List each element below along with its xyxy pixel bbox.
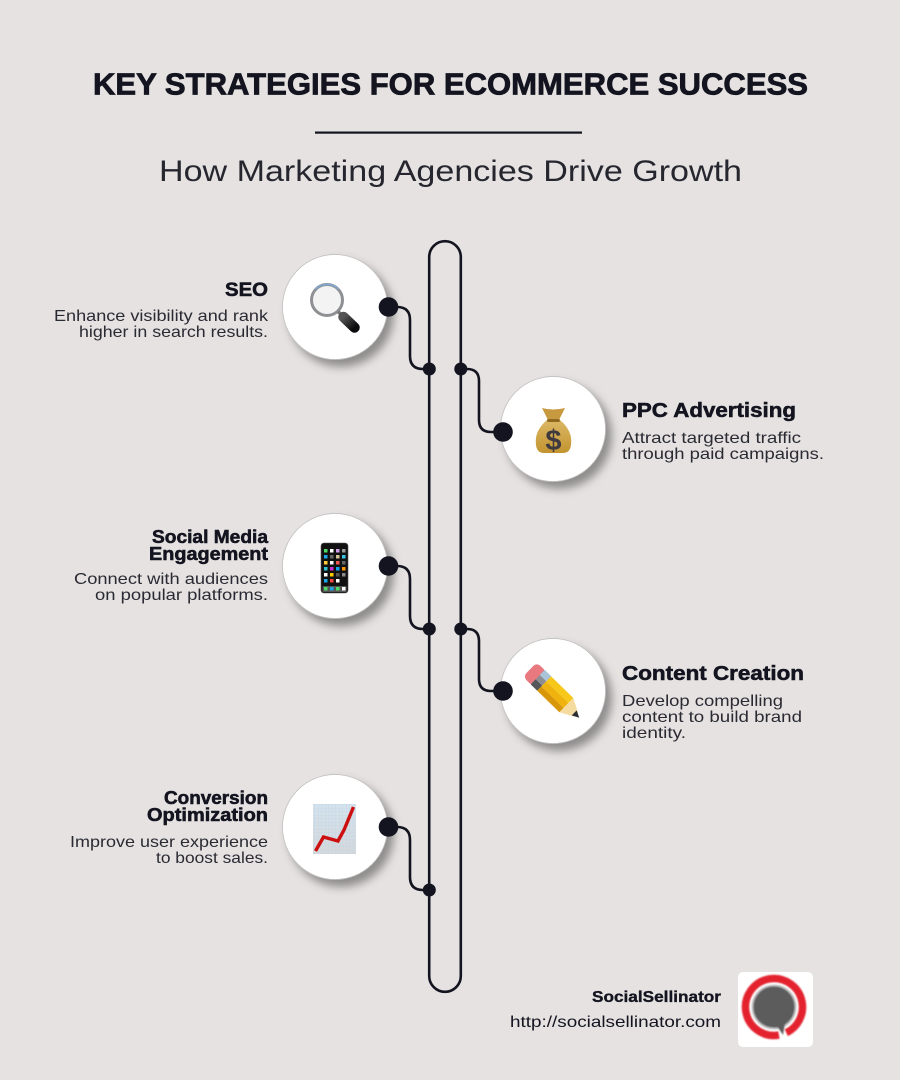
conversion text: Optimization [147, 805, 268, 825]
PPC text [622, 400, 824, 463]
SEO text: higher in search results. [79, 324, 268, 341]
footer brand text [510, 989, 721, 1031]
PPC text: through paid campaigns. [622, 446, 824, 463]
content creation text: content to build brand [622, 709, 802, 726]
content creation text [622, 663, 804, 742]
divider line under title [315, 132, 582, 134]
footer brand text: SocialSellinator [592, 989, 721, 1006]
content creation text: identity. [622, 725, 686, 742]
PPC text: PPC Advertising [622, 400, 796, 422]
conversion text [70, 788, 268, 867]
PPC node dot [493, 422, 513, 442]
footer brand text: http://socialsellinator.com [510, 1014, 721, 1031]
conversion node dot [379, 817, 398, 837]
SEO node dot [379, 297, 398, 317]
social media text: on popular platforms. [95, 587, 268, 604]
social media text [74, 527, 269, 604]
PPC text: Attract targeted traffic [622, 430, 801, 447]
conversion text: to boost sales. [156, 850, 268, 867]
icon: pencil [523, 662, 586, 725]
logo [738, 972, 813, 1047]
connector: social media to timeline [388, 566, 430, 629]
subtitle: How Marketing Agencies Drive Growth [159, 155, 742, 188]
social media text: Social Media [152, 527, 269, 547]
central timeline pipe [429, 241, 461, 992]
content creation text: Develop compelling [622, 693, 783, 710]
social media text: Engagement [149, 544, 268, 564]
panel: SEO [54, 254, 398, 360]
icon: smartphone [321, 543, 348, 593]
content creation node dot [493, 681, 513, 701]
content creation text: Content Creation [622, 663, 804, 685]
icon: money bag [536, 408, 571, 457]
panel: Content Creation [493, 638, 804, 744]
conversion circle [282, 774, 388, 880]
SEO text: SEO [225, 280, 268, 301]
connector: content creation to timeline [461, 629, 503, 691]
connector: PPC to timeline [461, 369, 503, 432]
social media text: Connect with audiences [74, 571, 268, 588]
connector: SEO to timeline [388, 307, 430, 369]
icon: rising chart [313, 804, 356, 854]
SEO circle [282, 254, 388, 360]
SEO text [54, 280, 269, 341]
timeline junction dots [423, 362, 467, 896]
panel: Social Media Engagement [74, 514, 398, 618]
connector: conversion to timeline [388, 827, 430, 890]
icon: magnifying glass [312, 284, 354, 328]
content creation circle [500, 638, 606, 744]
PPC circle [500, 376, 606, 482]
SEO text: Enhance visibility and rank [54, 308, 269, 325]
icon: money bag: $ [545, 425, 562, 457]
conversion text: Conversion [164, 788, 268, 808]
title: KEY STRATEGIES FOR ECOMMERCE SUCCESS [93, 66, 808, 102]
social media node dot [379, 556, 398, 576]
social media circle [282, 514, 388, 618]
panel: PPC Advertising [493, 376, 824, 482]
conversion text: Improve user experience [70, 834, 268, 851]
panel: Conversion Optimization [70, 774, 398, 880]
